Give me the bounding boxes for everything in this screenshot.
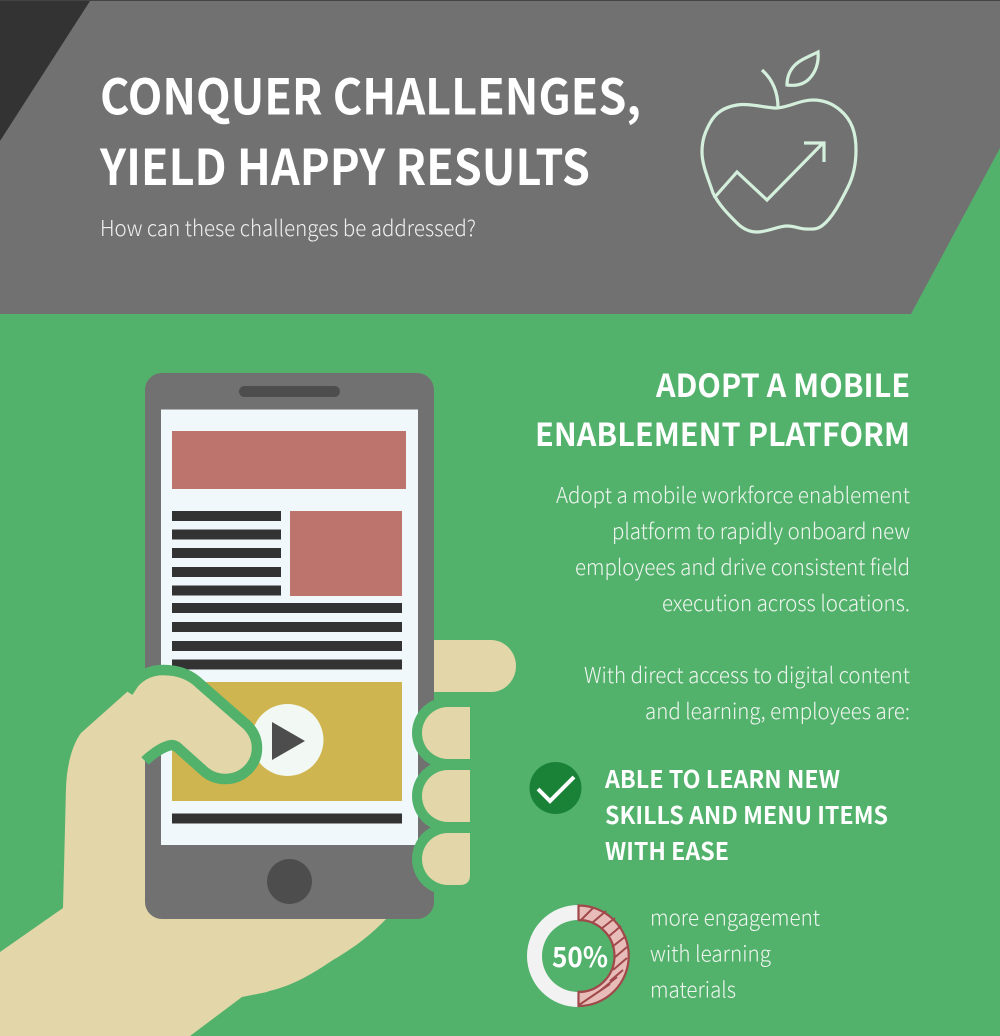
- donut chart: 50%: [527, 905, 629, 1007]
- benefit text: ABLE TO LEARN NEW: [604, 760, 840, 795]
- benefit text: SKILLS AND MENU ITEMS: [605, 796, 888, 831]
- header panel: [0, 0, 1000, 314]
- body text: description: execution across locations.: [662, 586, 910, 618]
- stat description: materials: [650, 972, 736, 1004]
- title: YIELD HAPPY RESULTS: [99, 129, 590, 200]
- body text: direct access: [584, 658, 910, 726]
- index finger: [434, 640, 516, 692]
- body text: description: platform to rapidly onboard new: [612, 514, 910, 546]
- video panel: [172, 682, 402, 801]
- icon: check mark: [530, 762, 582, 814]
- text lines: [172, 511, 402, 824]
- heading: adopt a mobile enablement platform: [535, 361, 910, 456]
- title: [99, 58, 641, 200]
- body text: description: Adopt a mobile workforce enablement: [556, 478, 910, 510]
- arm and thumb: [0, 670, 257, 1036]
- stat description: [650, 900, 820, 1004]
- screen: [161, 410, 418, 845]
- body text: direct access: With direct access to digital content: [584, 658, 910, 690]
- subtitle: How can these challenges be addressed?: [100, 211, 476, 243]
- phone body: [145, 373, 434, 919]
- heading: adopt a mobile enablement platform: ADOPT A MOBILE: [655, 361, 910, 407]
- heading: adopt a mobile enablement platform: ENABLEMENT PLATFORM: [535, 410, 910, 456]
- ring finger: [422, 770, 470, 822]
- benefit text: [604, 760, 888, 867]
- body text: description: employees and drive consistent field: [575, 550, 910, 582]
- stat description: more engagement: [650, 900, 820, 932]
- home button: [267, 859, 312, 904]
- palm behind phone: [145, 880, 400, 1036]
- speaker: [239, 386, 340, 397]
- stat description: with learning: [650, 936, 771, 968]
- play button: [252, 704, 324, 776]
- benefit text: WITH EASE: [605, 832, 729, 867]
- side image: [290, 511, 402, 596]
- thumb outline: [128, 670, 257, 779]
- finger outlines: [412, 697, 484, 895]
- body text: direct access: and learning, employees are:: [645, 694, 910, 726]
- middle finger: [422, 707, 470, 759]
- body text: description: [556, 478, 910, 618]
- little finger: [422, 833, 470, 885]
- donut label: 50%: [552, 936, 608, 976]
- icon: apple with rising arrow: [702, 52, 856, 232]
- title: CONQUER CHALLENGES,: [100, 58, 641, 130]
- banner image: [172, 431, 406, 489]
- hand: [0, 640, 516, 1036]
- phone illustration: [145, 373, 434, 919]
